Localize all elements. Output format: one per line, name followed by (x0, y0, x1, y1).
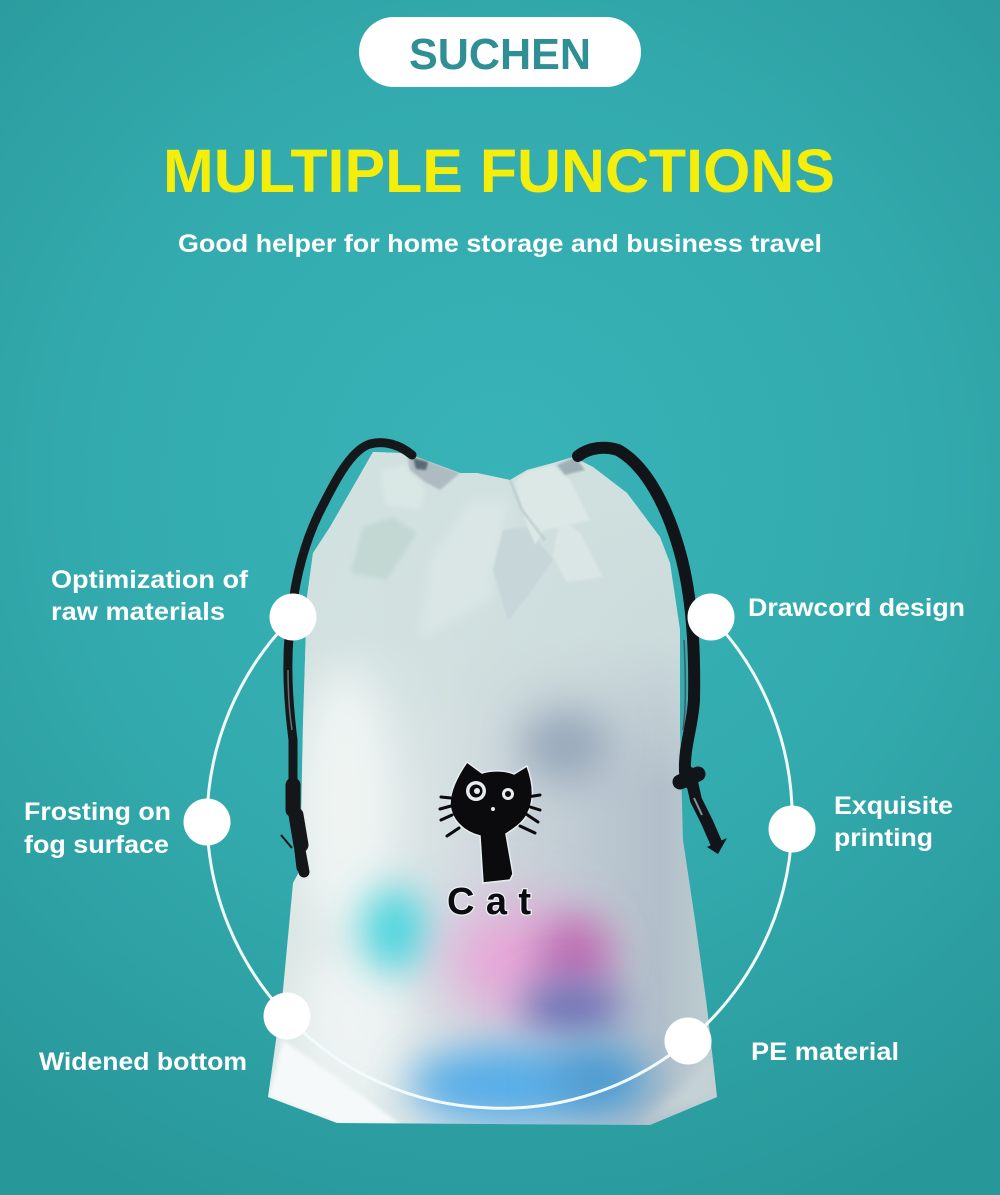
bag: cat print: Cat (447, 881, 531, 923)
label: frosting on fog surface: Frosting on (24, 798, 171, 826)
bag body (260, 440, 730, 1140)
bag: right drawcord (578, 448, 727, 854)
label: drawcord design: Drawcord design (748, 594, 965, 622)
label: frosting on fog surface (24, 798, 171, 859)
label: optimization of raw materials: raw materials (51, 598, 225, 626)
product: frosted drawstring bag (260, 440, 730, 1140)
bag: left drawcord (281, 443, 412, 872)
label: optimization of raw materials (51, 566, 249, 626)
brand pill: SUCHEN: SUCHEN (409, 30, 591, 79)
label: frosting on fog surface: fog surface (24, 831, 169, 859)
brand pill: SUCHEN (359, 17, 641, 87)
title: MULTIPLE FUNCTIONS (163, 137, 835, 205)
label: exquisite printing: printing (834, 824, 933, 852)
subtitle: Good helper for home storage and business travel (178, 230, 822, 258)
marker dots (184, 594, 816, 1064)
bag: blurred colour shading (520, 709, 610, 781)
bag: cat print (440, 762, 540, 923)
label: exquisite printing (834, 792, 953, 852)
label: optimization of raw materials: Optimization of (51, 566, 249, 594)
feature ring (207, 617, 792, 1108)
label: widened bottom: Widened bottom (39, 1048, 247, 1076)
bag: top folds (352, 457, 602, 620)
label: PE material: PE material (751, 1038, 899, 1066)
label: exquisite printing: Exquisite (834, 792, 953, 820)
